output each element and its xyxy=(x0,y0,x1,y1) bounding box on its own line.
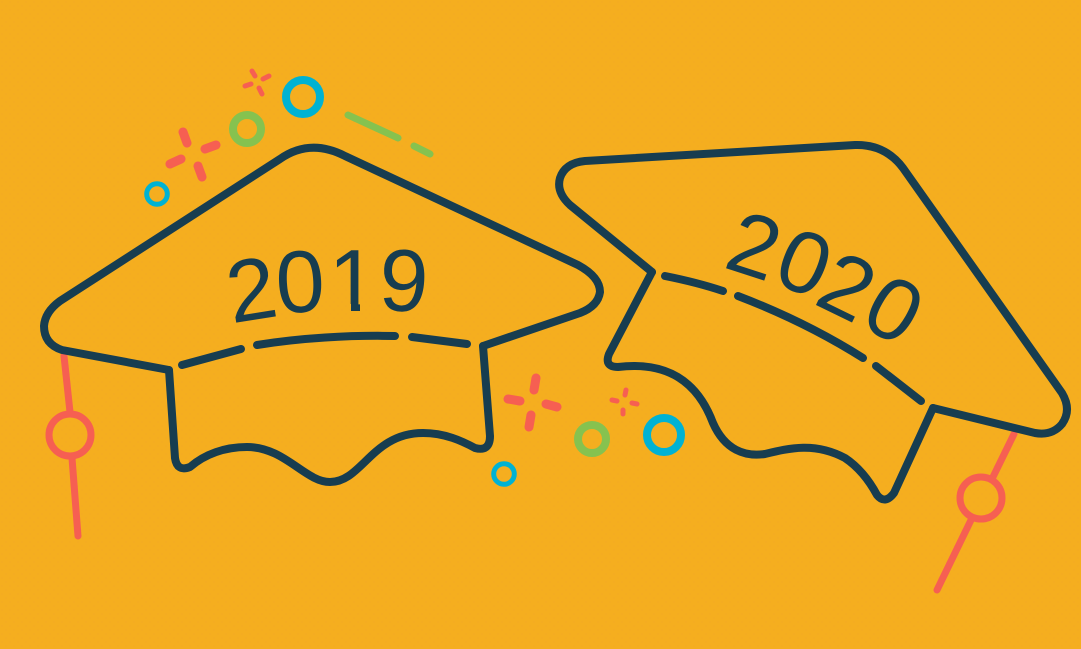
confetti middle xyxy=(494,378,681,484)
year label 2020: 2 xyxy=(804,231,891,342)
year label 2019: 2 xyxy=(219,237,283,342)
year label 2019: 1 xyxy=(328,231,377,330)
tassel 2020 xyxy=(937,434,1014,590)
year label 2019: 9 xyxy=(377,230,431,331)
year label 2020 xyxy=(716,191,940,364)
tassel 2019 xyxy=(49,356,91,536)
year label 2019 xyxy=(230,250,424,323)
year label 2020: 0 xyxy=(763,207,846,317)
year label 2020: 2 xyxy=(716,191,793,300)
confetti top xyxy=(147,71,430,204)
year label 2020: 0 xyxy=(848,254,940,364)
year label 2019: 0 xyxy=(273,231,327,332)
cap 2020 xyxy=(559,145,1067,500)
cap 2019 xyxy=(44,148,600,482)
